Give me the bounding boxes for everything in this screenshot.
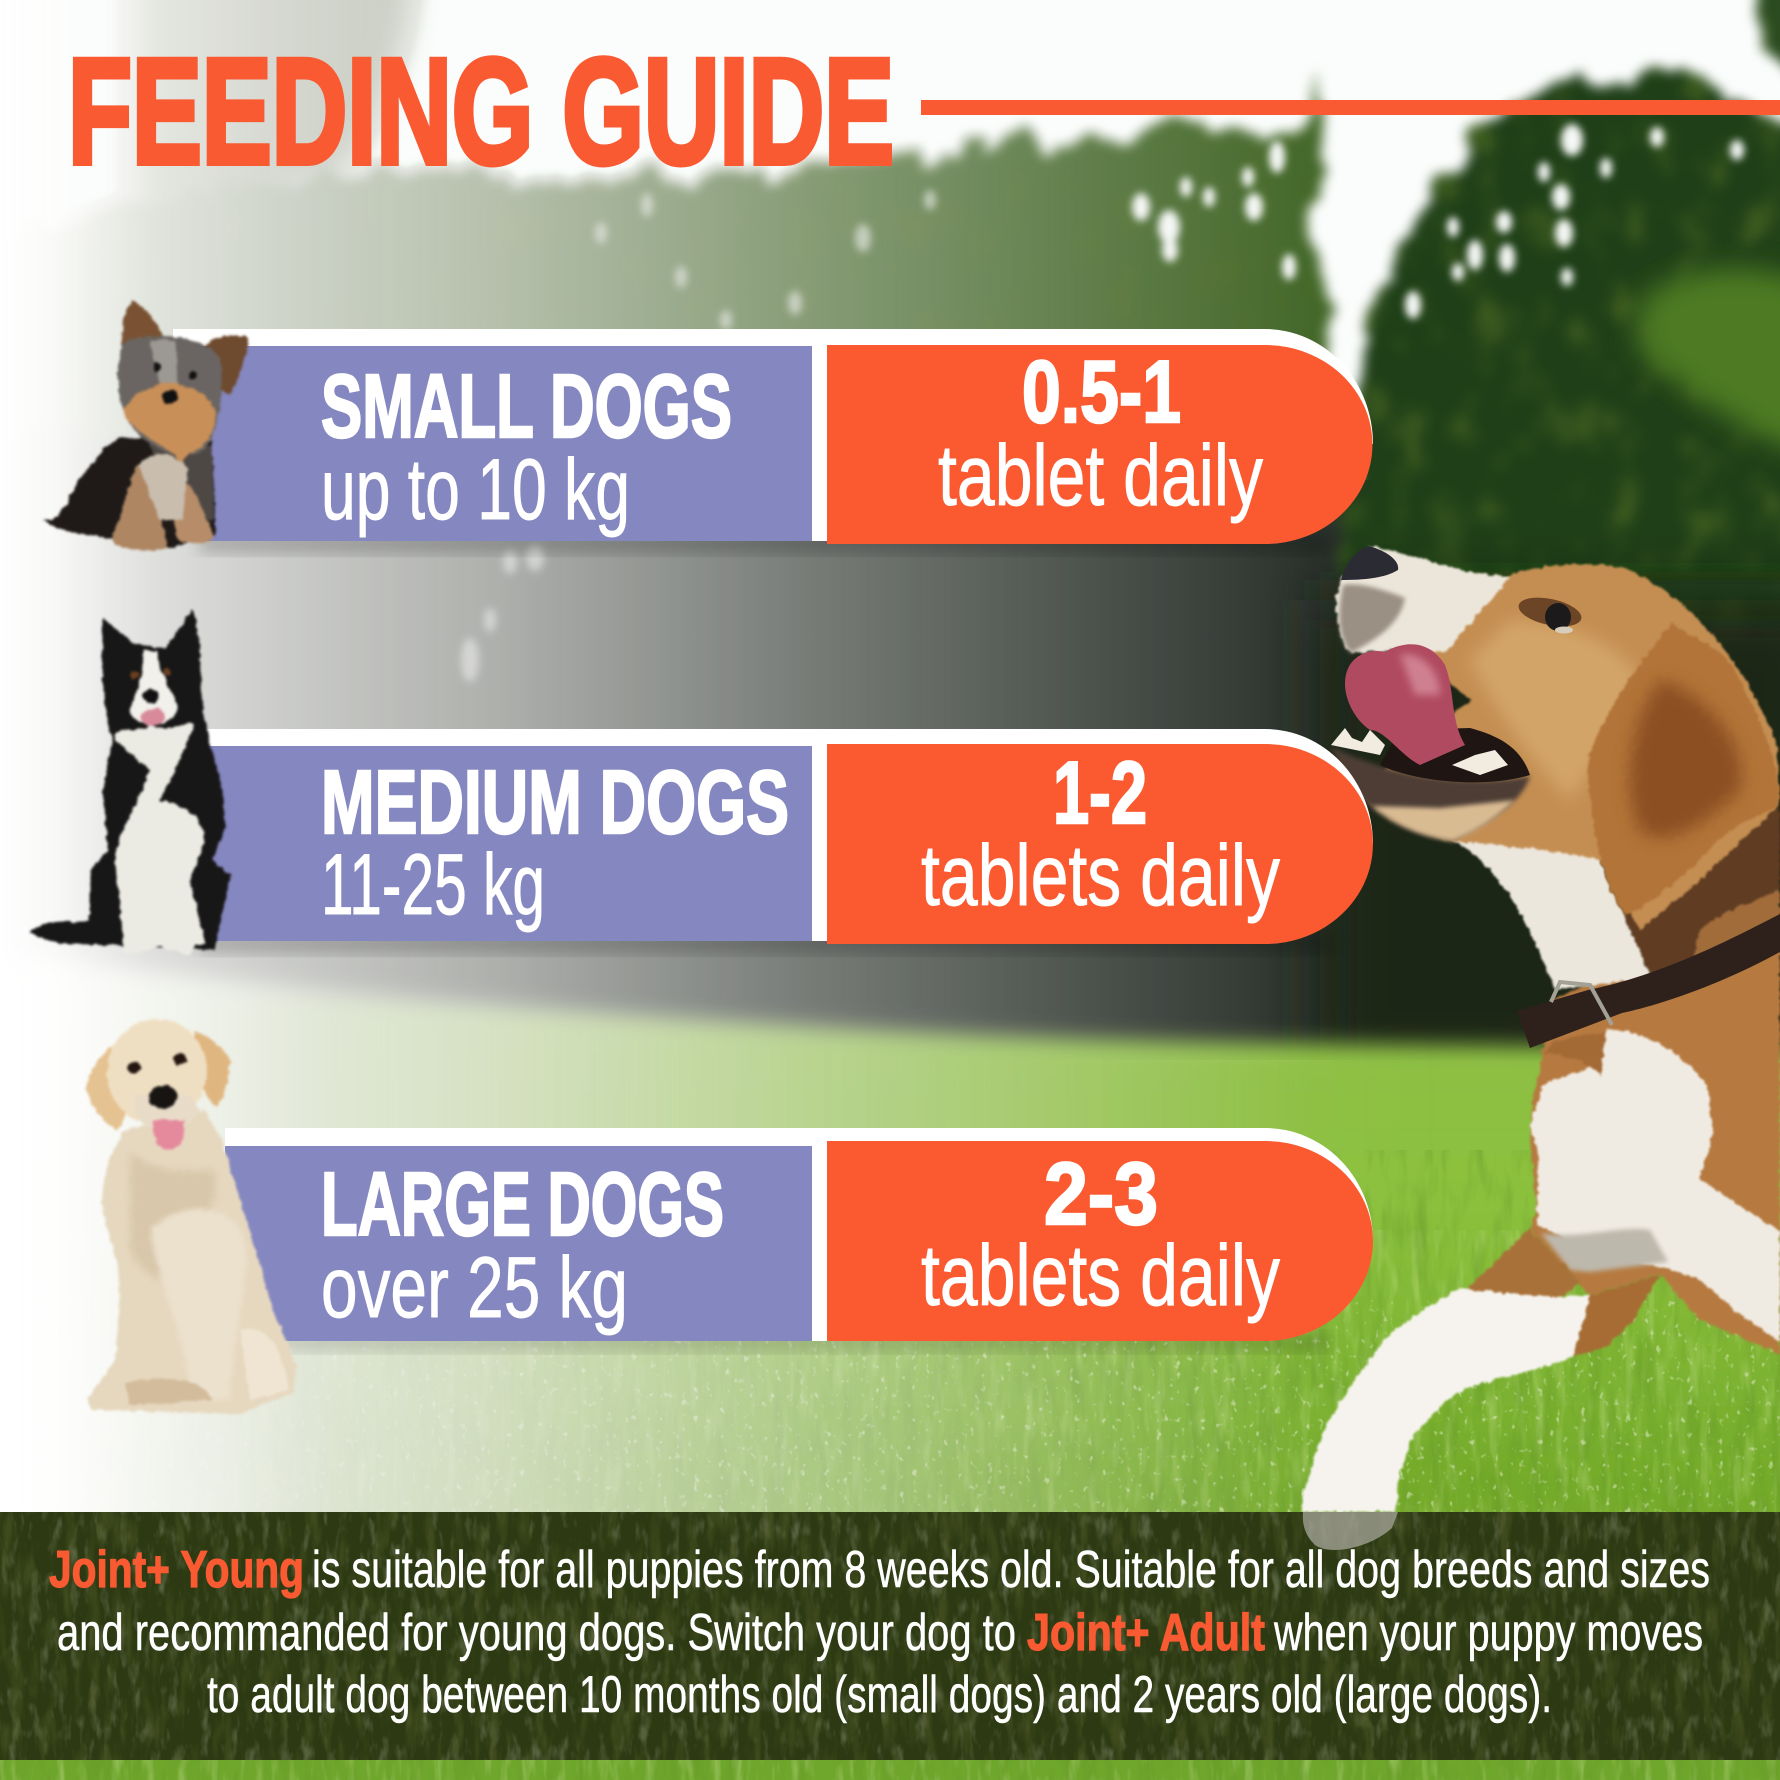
row 1 size panel: up to 10 kg xyxy=(321,442,630,538)
tree canopy middle xyxy=(0,63,1330,440)
row 2 size panel: 11-25 kg xyxy=(321,837,545,933)
bottom information band xyxy=(0,1512,1780,1760)
row 1: small dogs xyxy=(173,329,1373,552)
row 1 dosage panel: tablet daily xyxy=(938,428,1263,524)
row 1 shadow xyxy=(200,534,1330,552)
row 3: large dogs xyxy=(225,1128,1373,1350)
far dark woodland xyxy=(0,345,1780,1060)
photo: yorkshire terrier xyxy=(42,300,249,550)
photo: border collie xyxy=(30,610,230,955)
beagle front leg xyxy=(1302,1229,1660,1512)
sunlit foliage patch xyxy=(1640,269,1780,460)
row 1 size panel xyxy=(190,346,812,541)
title: FEEDING GUIDE xyxy=(68,27,894,195)
row 3 dosage panel: tablets daily xyxy=(921,1228,1280,1324)
row 2 white frame xyxy=(205,729,1373,941)
row 2 size panel: MEDIUM DOGS xyxy=(321,753,789,853)
line 2: and recommanded for young dogs. Switch your dog to xyxy=(57,1604,1016,1662)
beagle lower jaw xyxy=(1331,747,1530,841)
row 2 dosage panel: 1-2 xyxy=(1053,743,1147,842)
line 1: Joint+ Young xyxy=(49,1541,304,1599)
beagle body xyxy=(1530,905,1780,1354)
beagle head xyxy=(1331,546,1779,930)
row 3 shadow xyxy=(240,1334,1330,1350)
row 1 dosage panel: 0.5-1 xyxy=(1022,342,1181,441)
beagle neck xyxy=(1440,790,1780,990)
line 2: Joint+ Adult xyxy=(1027,1604,1265,1662)
beagle white chest and belly xyxy=(1530,1029,1780,1342)
beagle ear xyxy=(1588,623,1779,916)
row 1 dosage panel xyxy=(827,342,1372,544)
bottom grass strip xyxy=(0,1760,1780,1780)
photo: golden retriever xyxy=(86,1019,297,1414)
sky gaps in foliage xyxy=(1132,124,1744,319)
faint tree top-left xyxy=(140,0,410,240)
row 3 dosage panel: 2-3 xyxy=(1044,1144,1158,1243)
row 2 size panel xyxy=(205,746,812,941)
beagle nose xyxy=(1341,546,1398,580)
row 1 white frame xyxy=(173,329,1373,541)
row 3 size panel: over 25 kg xyxy=(321,1240,628,1336)
photo: beagle looking up xyxy=(1302,546,1780,1512)
row 3 size panel xyxy=(225,1146,812,1341)
row 2 shadow xyxy=(200,934,1330,952)
row 3 dosage panel xyxy=(827,1141,1373,1341)
beagle mouth and teeth xyxy=(1380,728,1530,782)
grass field xyxy=(0,960,1780,1780)
dark lower forest xyxy=(1320,600,1780,1080)
row 3 white frame xyxy=(225,1128,1373,1341)
big tree on the right xyxy=(1345,0,1780,640)
row 2 dosage panel: tablets daily xyxy=(921,828,1280,924)
beagle tongue xyxy=(1345,644,1465,765)
beagle eye xyxy=(1516,593,1584,634)
row 3 size panel: LARGE DOGS xyxy=(321,1155,724,1255)
beagle under-chest shade xyxy=(1541,1229,1668,1272)
row 2 dosage panel xyxy=(827,743,1373,944)
row 2: medium dogs xyxy=(200,729,1373,952)
paw seen through band xyxy=(1303,1512,1398,1550)
beagle collar xyxy=(1517,914,1780,1048)
row 1 size panel: SMALL DOGS xyxy=(321,357,732,457)
